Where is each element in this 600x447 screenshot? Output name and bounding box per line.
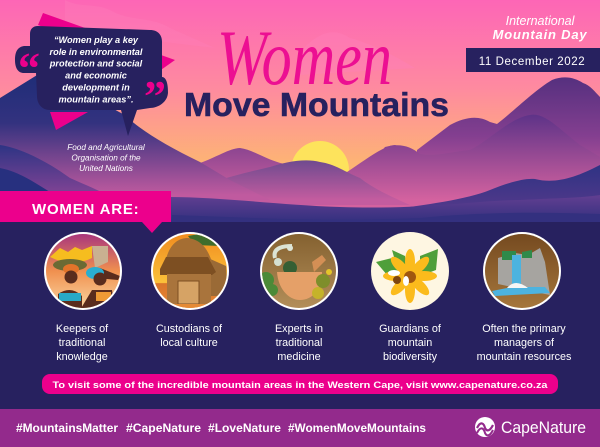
caption: keepers: Keepers of bbox=[56, 323, 109, 335]
date box bbox=[466, 48, 600, 72]
hashtags: #LoveNature bbox=[208, 423, 281, 435]
mountain range: middle right bbox=[350, 115, 600, 225]
hashtags bbox=[16, 423, 426, 435]
quote text: protection and social bbox=[49, 58, 143, 68]
quote text: mountain areas”. bbox=[58, 94, 134, 104]
title: Women: Women bbox=[217, 14, 392, 101]
call to action pill bbox=[42, 374, 558, 394]
title: Move Mountains: Move Mountains bbox=[184, 86, 449, 123]
caption: managers: managers of bbox=[494, 337, 555, 349]
call to action pill: To visit some of the incredible mountain areas in the Western Cape, visit www.capenature.co.za bbox=[52, 380, 548, 391]
sky background bbox=[0, 0, 600, 225]
hashtags: #MountainsMatter bbox=[16, 423, 119, 435]
navy lower panel bbox=[0, 222, 600, 409]
hashtags: #CapeNature bbox=[126, 423, 201, 435]
caption: managers: Often the primary bbox=[482, 323, 566, 335]
quote attribution: United Nations bbox=[79, 164, 133, 173]
bubble shape bbox=[15, 26, 168, 136]
mountain range: back right bbox=[417, 77, 600, 225]
mountain range: left navy peak bbox=[0, 72, 270, 200]
foothills bbox=[0, 145, 115, 200]
hashtags: #WomenMoveMountains bbox=[288, 423, 426, 435]
icon: experts in medicine bbox=[258, 232, 338, 310]
event name bbox=[493, 14, 587, 42]
icon: guardians of biodiversity bbox=[371, 232, 449, 310]
speech bubble with quote bbox=[15, 13, 175, 136]
pink triangle accents bbox=[38, 13, 175, 130]
quote text: development in bbox=[62, 82, 130, 92]
date box: 11 December 2022 bbox=[479, 56, 585, 68]
caption: custodians: Custodians of bbox=[156, 323, 223, 335]
caption: managers: mountain resources bbox=[477, 351, 572, 363]
quote text: role in environmental bbox=[50, 47, 143, 57]
caption: keepers: traditional bbox=[59, 337, 105, 349]
quote text: and economic bbox=[65, 70, 127, 80]
banner: women are bbox=[0, 191, 171, 233]
sun bbox=[291, 141, 349, 199]
event name: Mountain Day bbox=[493, 27, 587, 42]
mountain range: front centre bbox=[170, 160, 410, 205]
mountain range: centre bbox=[200, 145, 480, 225]
bubble quote marks: “ bbox=[18, 44, 40, 93]
quote text bbox=[49, 35, 143, 104]
bubble quote marks bbox=[18, 44, 166, 121]
caption: experts: medicine bbox=[277, 351, 321, 363]
caption: experts: traditional bbox=[276, 337, 322, 349]
quote attribution bbox=[67, 143, 145, 173]
circle captions bbox=[56, 323, 572, 363]
footer bar bbox=[0, 409, 600, 447]
banner: women are: WOMEN ARE: bbox=[32, 201, 139, 218]
caption: guardians: biodiversity bbox=[383, 351, 438, 363]
quote attribution: Organisation of the bbox=[71, 154, 141, 162]
icon: keepers of knowledge bbox=[44, 232, 122, 310]
quote text: “Women play a key bbox=[54, 35, 139, 45]
icon: managers of resources bbox=[483, 232, 561, 310]
caption: keepers: knowledge bbox=[56, 351, 108, 363]
icon: custodians of culture bbox=[151, 232, 229, 310]
caption: guardians: Guardians of bbox=[379, 323, 442, 335]
caption: guardians: mountain bbox=[388, 337, 432, 349]
bubble quote marks: ” bbox=[144, 72, 166, 121]
pale background hills bbox=[65, 0, 415, 75]
caption: experts: Experts in bbox=[275, 323, 323, 335]
caption: custodians: local culture bbox=[160, 337, 218, 349]
logo: CapeNature bbox=[475, 417, 586, 437]
quote attribution: Food and Agricultural bbox=[67, 143, 145, 152]
event name: International bbox=[506, 14, 576, 28]
logo: CapeNature: CapeNature bbox=[501, 418, 586, 437]
